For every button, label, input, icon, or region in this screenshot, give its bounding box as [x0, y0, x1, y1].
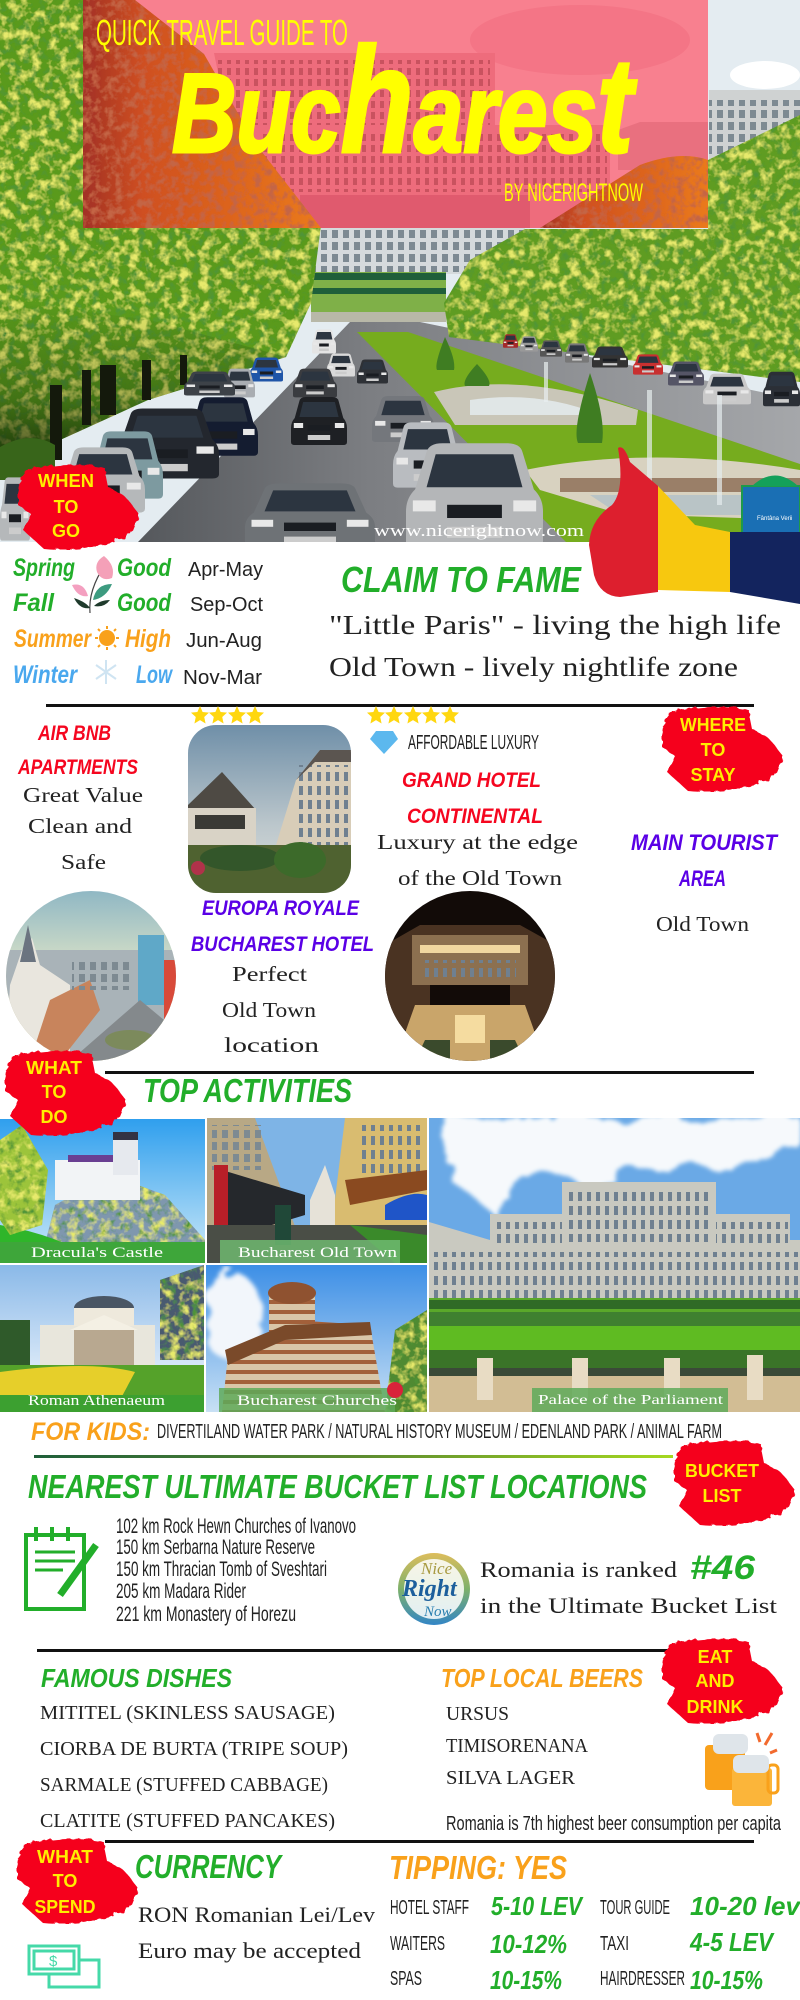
heading: top activities: TOP ACTIVITIES — [143, 1072, 352, 1109]
photo: city aerial circle — [0, 890, 180, 1065]
affordable luxury: AFFORDABLE LUXURY — [408, 732, 539, 754]
panel: tipping — [389, 1849, 800, 1995]
label: where to stay: WHERE — [680, 715, 746, 735]
icon: beers — [705, 1733, 778, 1806]
panel: famous dishes: CLATITE (STUFFED PANCAKES) — [40, 1810, 335, 1832]
street sign: Fântâna Verii — [757, 516, 792, 522]
for kids line — [31, 1418, 722, 1446]
season table: Apr-May — [188, 559, 263, 581]
label: what to do: DO — [40, 1107, 68, 1127]
photo: roman athenaeum — [0, 1265, 204, 1412]
shrubs — [0, 438, 55, 480]
panel: currency — [135, 1848, 375, 1963]
label: where to stay: TO — [701, 740, 725, 760]
label: what to spend — [16, 1839, 138, 1923]
icon: notepad — [26, 1527, 96, 1609]
panel: famous dishes: MITITEL (SKINLESS SAUSAGE) — [40, 1702, 335, 1724]
icon: money — [29, 1946, 99, 1987]
photo: bucharest churches — [205, 1265, 427, 1412]
season table: Summer — [14, 625, 92, 653]
panel: tipping: 4-5 LEV — [689, 1927, 775, 1957]
panel: air bnb — [17, 722, 143, 874]
stars: four — [191, 706, 264, 723]
label: what to spend: WHAT — [37, 1847, 93, 1867]
panel: top local beers: TOP LOCAL BEERS — [441, 1663, 644, 1693]
panel: tipping: HOTEL STAFF — [390, 1897, 469, 1919]
panel: currency: RON Romanian Lei/Lev — [138, 1902, 375, 1927]
panel: tipping: TOUR GUIDE — [600, 1897, 670, 1919]
caption: old town: Bucharest Old Town — [238, 1245, 398, 1261]
fountain: upper — [434, 362, 638, 425]
label: what to spend: SPEND — [34, 1897, 96, 1917]
icon: snowflake — [96, 660, 116, 684]
season table: Low — [136, 661, 173, 689]
caption: dracula's castle: Dracula's Castle — [31, 1245, 163, 1261]
parked cars: right — [503, 334, 800, 406]
caption: palace: Palace of the Parliament — [538, 1393, 723, 1408]
logo: nice right now — [398, 1553, 470, 1625]
website watermark: www.nicerightnow.com — [374, 521, 584, 540]
title: Bucharest — [172, 16, 637, 184]
panel: tipping: SPAS — [390, 1968, 422, 1990]
ranking text: #46 — [690, 1549, 756, 1587]
panel: grand hotel text: of the Old Town — [398, 866, 563, 890]
panel: main tourist area — [631, 830, 778, 936]
panel: main tourist area: Old Town — [656, 912, 750, 936]
season table — [13, 554, 263, 689]
label: when to go: GO — [52, 521, 80, 541]
panel: top local beers — [441, 1663, 782, 1835]
tree: left side — [0, 0, 321, 464]
photo: old town — [207, 1118, 427, 1263]
logo: nice right now: Nice — [420, 1559, 453, 1578]
panel: tipping: 10-15% — [690, 1965, 763, 1995]
cone trees — [436, 337, 603, 443]
panel: main tourist area: AREA — [678, 866, 726, 891]
panel: tipping: TAXI — [600, 1933, 629, 1955]
parked cars: left — [0, 358, 283, 541]
bucket list locations — [116, 1515, 356, 1626]
panel: europa royale text: EUROPA ROYALE — [202, 897, 360, 920]
season table: Sep-Oct — [190, 594, 263, 616]
panel: air bnb: Clean and — [28, 814, 133, 838]
panel: europa royale text: Perfect — [232, 962, 307, 986]
median lawn — [357, 332, 800, 542]
title: BY NICERIGHTNOW — [504, 179, 643, 207]
label: what to do: WHAT — [26, 1058, 82, 1078]
label: bucket list: LIST — [702, 1486, 742, 1506]
claim to fame text — [329, 610, 781, 682]
icon: flower — [72, 556, 113, 613]
bucket list locations: 221 km Monastery of Horezu — [116, 1603, 296, 1626]
icon: sun — [95, 626, 119, 650]
label: where to stay — [661, 707, 783, 791]
street sign — [742, 476, 800, 538]
title: QUICK TRAVEL GUIDE TO — [96, 12, 348, 53]
panel: europa royale text — [191, 897, 374, 1057]
season table: High — [125, 625, 171, 653]
photo: dracula's castle — [0, 1119, 205, 1263]
panel: tipping: 10-12% — [490, 1929, 567, 1959]
palace base below banner — [300, 228, 525, 274]
ranking text — [480, 1549, 777, 1618]
thumbs-up flag hand — [589, 447, 800, 604]
season table: Spring — [13, 554, 75, 582]
panel: air bnb: AIR BNB — [37, 722, 111, 745]
panel: currency: Euro may be accepted — [138, 1938, 361, 1963]
caption: roman athenaeum: Roman Athenaeum — [28, 1393, 165, 1409]
claim to fame text: Old Town - lively nightlife zone — [329, 652, 738, 682]
label: what to spend: TO — [53, 1871, 77, 1891]
panel: top local beers: TIMISORENANA — [446, 1735, 589, 1757]
heading: claim to fame: CLAIM TO FAME — [341, 559, 582, 600]
panel: europa royale text: BUCHAREST HOTEL — [191, 933, 374, 956]
panel: tipping: TIPPING: YES — [389, 1849, 567, 1886]
bucket list locations: 205 km Madara Rider — [116, 1580, 246, 1603]
panel: air bnb: Safe — [61, 850, 106, 874]
label: when to go: TO — [54, 497, 78, 517]
icon: diamond — [370, 731, 398, 754]
panel: currency: CURRENCY — [135, 1848, 283, 1885]
label: when to go — [17, 465, 139, 549]
season table: Nov-Mar — [183, 667, 262, 689]
panel: tipping: 5-10 LEV — [491, 1891, 584, 1921]
label: eat and drink — [661, 1639, 783, 1723]
logo: nice right now: Now — [423, 1604, 452, 1620]
ranking text: Romania is ranked — [480, 1557, 677, 1582]
label: what to do: TO — [42, 1082, 66, 1102]
panel: top local beers: URSUS — [446, 1703, 509, 1725]
road — [138, 322, 800, 542]
panel: famous dishes: CIORBA DE BURTA (TRIPE SOUP) — [40, 1738, 348, 1760]
panel: grand hotel text: CONTINENTAL — [407, 805, 543, 828]
panel: tipping: 10-20 lev — [690, 1891, 800, 1921]
panel: europa royale text: location — [224, 1033, 320, 1057]
label: bucket list — [673, 1441, 795, 1525]
season table: Good — [117, 589, 172, 617]
label: when to go: WHEN — [38, 471, 94, 491]
panel: tipping: WAITERS — [390, 1933, 445, 1955]
panel: famous dishes: SARMALE (STUFFED CABBAGE) — [40, 1774, 328, 1796]
bucket list locations: 150 km Serbarna Nature Reserve — [116, 1536, 315, 1559]
heading: nearest bucket list locations: NEAREST ULTIMATE BUCKET LIST LOCATIONS — [28, 1468, 647, 1505]
stars: five — [367, 706, 459, 723]
tree shade — [0, 313, 286, 447]
panel: tipping: HAIRDRESSER — [600, 1968, 685, 1990]
claim to fame text: "Little Paris" - living the high life — [329, 610, 781, 640]
panel: grand hotel text: Luxury at the edge — [377, 830, 578, 854]
title banner — [83, 0, 708, 228]
palace through banner — [214, 53, 708, 228]
tree: right side — [444, 115, 800, 382]
bucket list locations: 150 km Thracian Tomb of Sveshtari — [116, 1558, 327, 1581]
ranking text: in the Ultimate Bucket List — [480, 1593, 777, 1618]
photo: europa royale — [188, 725, 351, 893]
bucket list locations: 102 km Rock Hewn Churches of Ivanovo — [116, 1515, 356, 1538]
panel: europa royale text: Old Town — [222, 998, 317, 1022]
traffic cars — [245, 330, 543, 551]
season table: Jun-Aug — [186, 630, 262, 652]
icon: money: $ — [49, 1953, 58, 1970]
panel: famous dishes: FAMOUS DISHES — [41, 1663, 233, 1693]
for kids line: FOR KIDS: — [31, 1418, 150, 1446]
panel: top local beers: SILVA LAGER — [446, 1767, 576, 1789]
label: bucket list: BUCKET — [685, 1461, 759, 1481]
fountain: lower — [525, 390, 800, 520]
season table: Winter — [13, 661, 78, 689]
label: eat and drink: DRINK — [686, 1697, 744, 1717]
panel: famous dishes — [40, 1663, 348, 1832]
panel: air bnb: Great Value — [23, 783, 143, 807]
label: what to do — [4, 1051, 126, 1135]
season table: Fall — [13, 589, 55, 617]
label: eat and drink: EAT — [698, 1647, 732, 1667]
panel: main tourist area: MAIN TOURIST — [631, 830, 778, 855]
label: eat and drink: AND — [696, 1671, 734, 1691]
panel: tipping: 10-15% — [490, 1965, 562, 1995]
logo: nice right now: Right — [401, 1576, 458, 1602]
photo: palace of the parliament — [429, 1118, 800, 1412]
panel: grand hotel text: GRAND HOTEL — [402, 769, 541, 792]
season table: Good — [117, 554, 172, 582]
panel: grand hotel text — [377, 769, 578, 890]
label: where to stay: STAY — [690, 765, 736, 785]
hero photo: boulevard — [0, 0, 800, 551]
panel: air bnb: APARTMENTS — [17, 756, 138, 779]
lawn behind road — [311, 272, 446, 322]
photo: grand hotel night — [385, 890, 557, 1062]
autumn tree through banner — [83, 0, 321, 228]
caption: bucharest churches: Bucharest Churches — [237, 1393, 397, 1409]
trunks — [50, 355, 187, 460]
